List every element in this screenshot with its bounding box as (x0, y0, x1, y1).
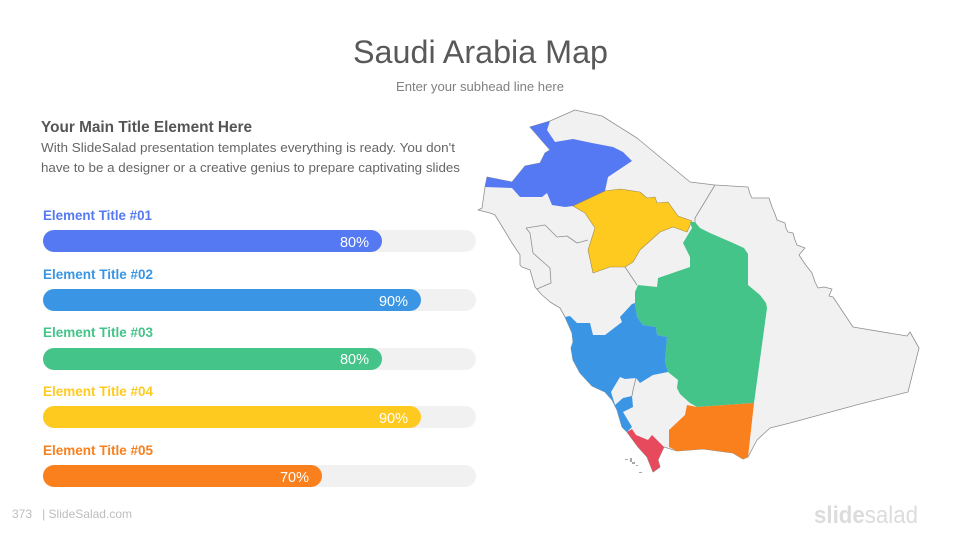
intro body: With SlideSalad presentation templates everything is ready. You don't (41, 141, 456, 155)
progress bar: element 03 (43, 324, 476, 370)
region: south-west (dark blue) (565, 303, 668, 432)
progress bar: element 02 (43, 266, 476, 311)
intro heading: Your Main Title Element Here (41, 119, 252, 136)
progress bar: element 01: Element Title #01 (43, 207, 152, 223)
region: eastern interior (green) (635, 222, 767, 407)
progress bar: element 02: 90% (379, 294, 408, 310)
title: Saudi Arabia Map (353, 34, 608, 70)
progress bar: element 03: Element Title #03 (43, 324, 153, 340)
progress bar: element 05: Element Title #05 (43, 442, 153, 458)
map base: country outline (478, 110, 919, 472)
intro body (41, 141, 460, 175)
progress bar: element 03: 80% (340, 352, 369, 368)
footer logo: slidesalad (814, 502, 918, 529)
subtitle: Enter your subhead line here (396, 79, 564, 94)
region: south (orange) (669, 403, 754, 459)
region: far south (red) (627, 429, 664, 472)
progress bar: element 05: 70% (280, 470, 309, 486)
region: central (yellow) (573, 189, 692, 273)
progress bar: element 04 (43, 383, 476, 428)
text block: main intro (41, 119, 460, 175)
region: north-west (blue) (485, 121, 632, 207)
progress bar: element 01 (43, 207, 476, 252)
progress bar: element 04: Element Title #04 (43, 383, 153, 399)
map internal borders (526, 185, 715, 396)
progress bar: element 05 (43, 442, 476, 487)
progress bar: element 02: Element Title #02 (43, 266, 153, 282)
progress bar: element 01: 80% (340, 235, 369, 251)
map of Saudi Arabia (478, 110, 919, 473)
intro body: have to be a designer or a creative genius to prepare captivating slides (41, 161, 460, 175)
map islands (625, 458, 642, 473)
footer page number: 373 | SlideSalad.com (12, 507, 132, 521)
progress bar: element 04: 90% (379, 411, 408, 427)
